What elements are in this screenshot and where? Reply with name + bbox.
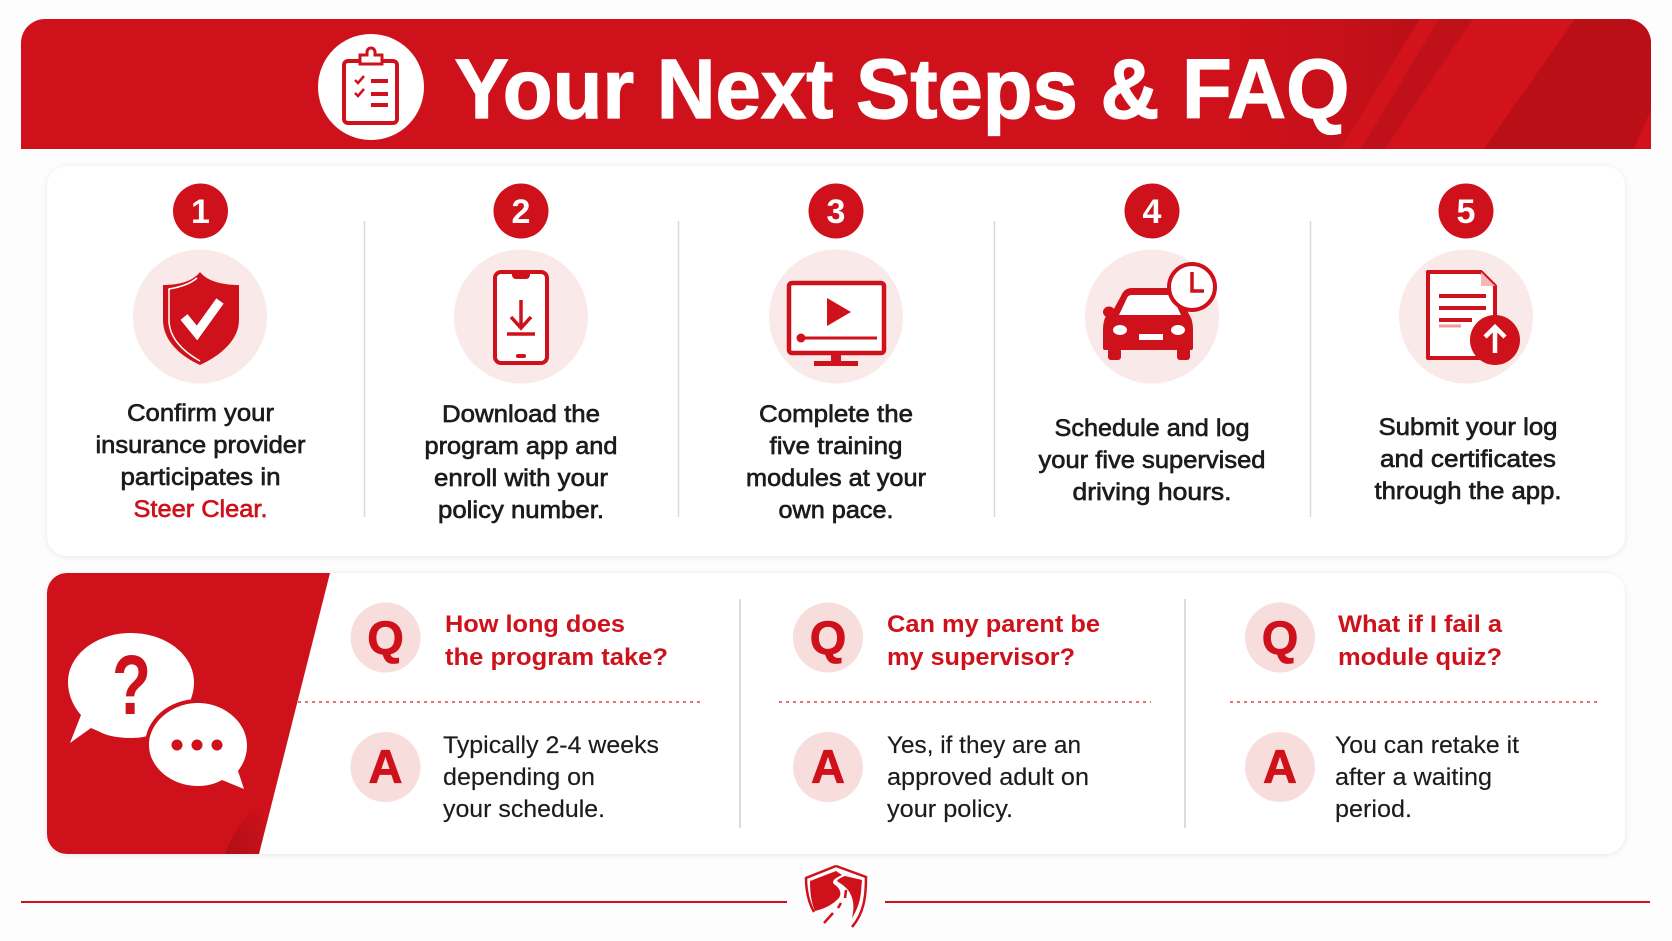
step 5: 5 [1457, 193, 1475, 231]
FAQ 1: A [369, 740, 402, 793]
step 5 text: and certificates [1380, 446, 1556, 473]
step 4 [1038, 184, 1266, 506]
step 2 text: program app and [424, 433, 618, 460]
FAQ 3: module quiz? [1338, 644, 1502, 671]
header banner [21, 19, 1651, 149]
FAQ 3 [1245, 602, 1519, 823]
title: Your Next Steps & FAQ [454, 42, 1350, 136]
panel: FAQ [47, 573, 1625, 854]
FAQ 3: What if I fail a [1338, 611, 1503, 638]
FAQ 1: Typically 2-4 weeks [443, 732, 659, 759]
FAQ 3: A [1263, 740, 1297, 793]
step 2 [424, 184, 618, 524]
step 1 text: insurance provider [96, 432, 306, 459]
icon: speech bubbles: ? [112, 638, 151, 732]
step 1 [96, 184, 306, 523]
step 4 text [1038, 415, 1266, 506]
step 1 text: Confirm your [127, 400, 274, 427]
step 3: 3 [827, 193, 845, 231]
FAQ 1: your schedule. [443, 796, 605, 823]
FAQ 3: Q [1262, 611, 1298, 664]
icon: speech bubbles [68, 633, 251, 791]
step 4 text: Schedule and log [1054, 415, 1250, 442]
step 3 text: own pace. [778, 497, 894, 524]
red wedge with speech bubbles [47, 573, 330, 854]
step 2: 2 [512, 193, 530, 231]
FAQ 2: approved adult on [887, 764, 1089, 791]
step 5 text [1374, 414, 1562, 505]
step 4 text: driving hours. [1072, 479, 1232, 506]
icon: phone download [495, 272, 547, 363]
footer with shield logo [21, 866, 1650, 927]
FAQ 2: Can my parent be [887, 611, 1100, 638]
FAQ 1: the program take? [445, 644, 668, 671]
step 2 text: enroll with your [434, 465, 608, 492]
FAQ 3: period. [1335, 796, 1412, 823]
FAQ 1 [350, 602, 668, 823]
step 2 text: policy number. [438, 497, 604, 524]
FAQ 1: How long does [445, 611, 625, 638]
step 1 text: Steer Clear. [134, 496, 268, 523]
step 1: 1 [191, 193, 210, 231]
step 3 text [746, 401, 926, 524]
step 5 text: Submit your log [1378, 414, 1558, 441]
FAQ 2 [793, 602, 1100, 823]
step 3 text: five training [770, 433, 902, 460]
FAQ 2: your policy. [887, 796, 1013, 823]
step 5 text: through the app. [1374, 478, 1562, 505]
icon: video monitor [789, 283, 884, 366]
FAQ 1: Q [367, 611, 404, 664]
step 2 text: Download the [442, 401, 600, 428]
step 4: 4 [1143, 193, 1162, 231]
icon: shield check [163, 272, 239, 365]
step 3 text: modules at your [746, 465, 926, 492]
icon: document upload [1428, 272, 1520, 365]
icon: shield road logo [806, 866, 866, 927]
icon: clipboard checklist [318, 34, 424, 140]
step 3 [746, 184, 926, 524]
FAQ 1: depending on [443, 764, 595, 791]
FAQ 2: Q [810, 611, 846, 664]
step 3 text: Complete the [759, 401, 913, 428]
panel: steps [47, 166, 1625, 556]
FAQ 2: my supervisor? [887, 644, 1075, 671]
FAQ 2: Yes, if they are an [887, 732, 1081, 759]
step 5 [1374, 184, 1562, 505]
FAQ 2: A [811, 740, 845, 793]
icon: car and clock [1103, 264, 1215, 360]
FAQ 3: after a waiting [1335, 764, 1492, 791]
FAQ 3: You can retake it [1335, 732, 1519, 759]
step 1 text: participates in [120, 464, 280, 491]
step 1 text [96, 400, 306, 523]
step 2 text [424, 401, 618, 524]
step 4 text: your five supervised [1038, 447, 1266, 474]
